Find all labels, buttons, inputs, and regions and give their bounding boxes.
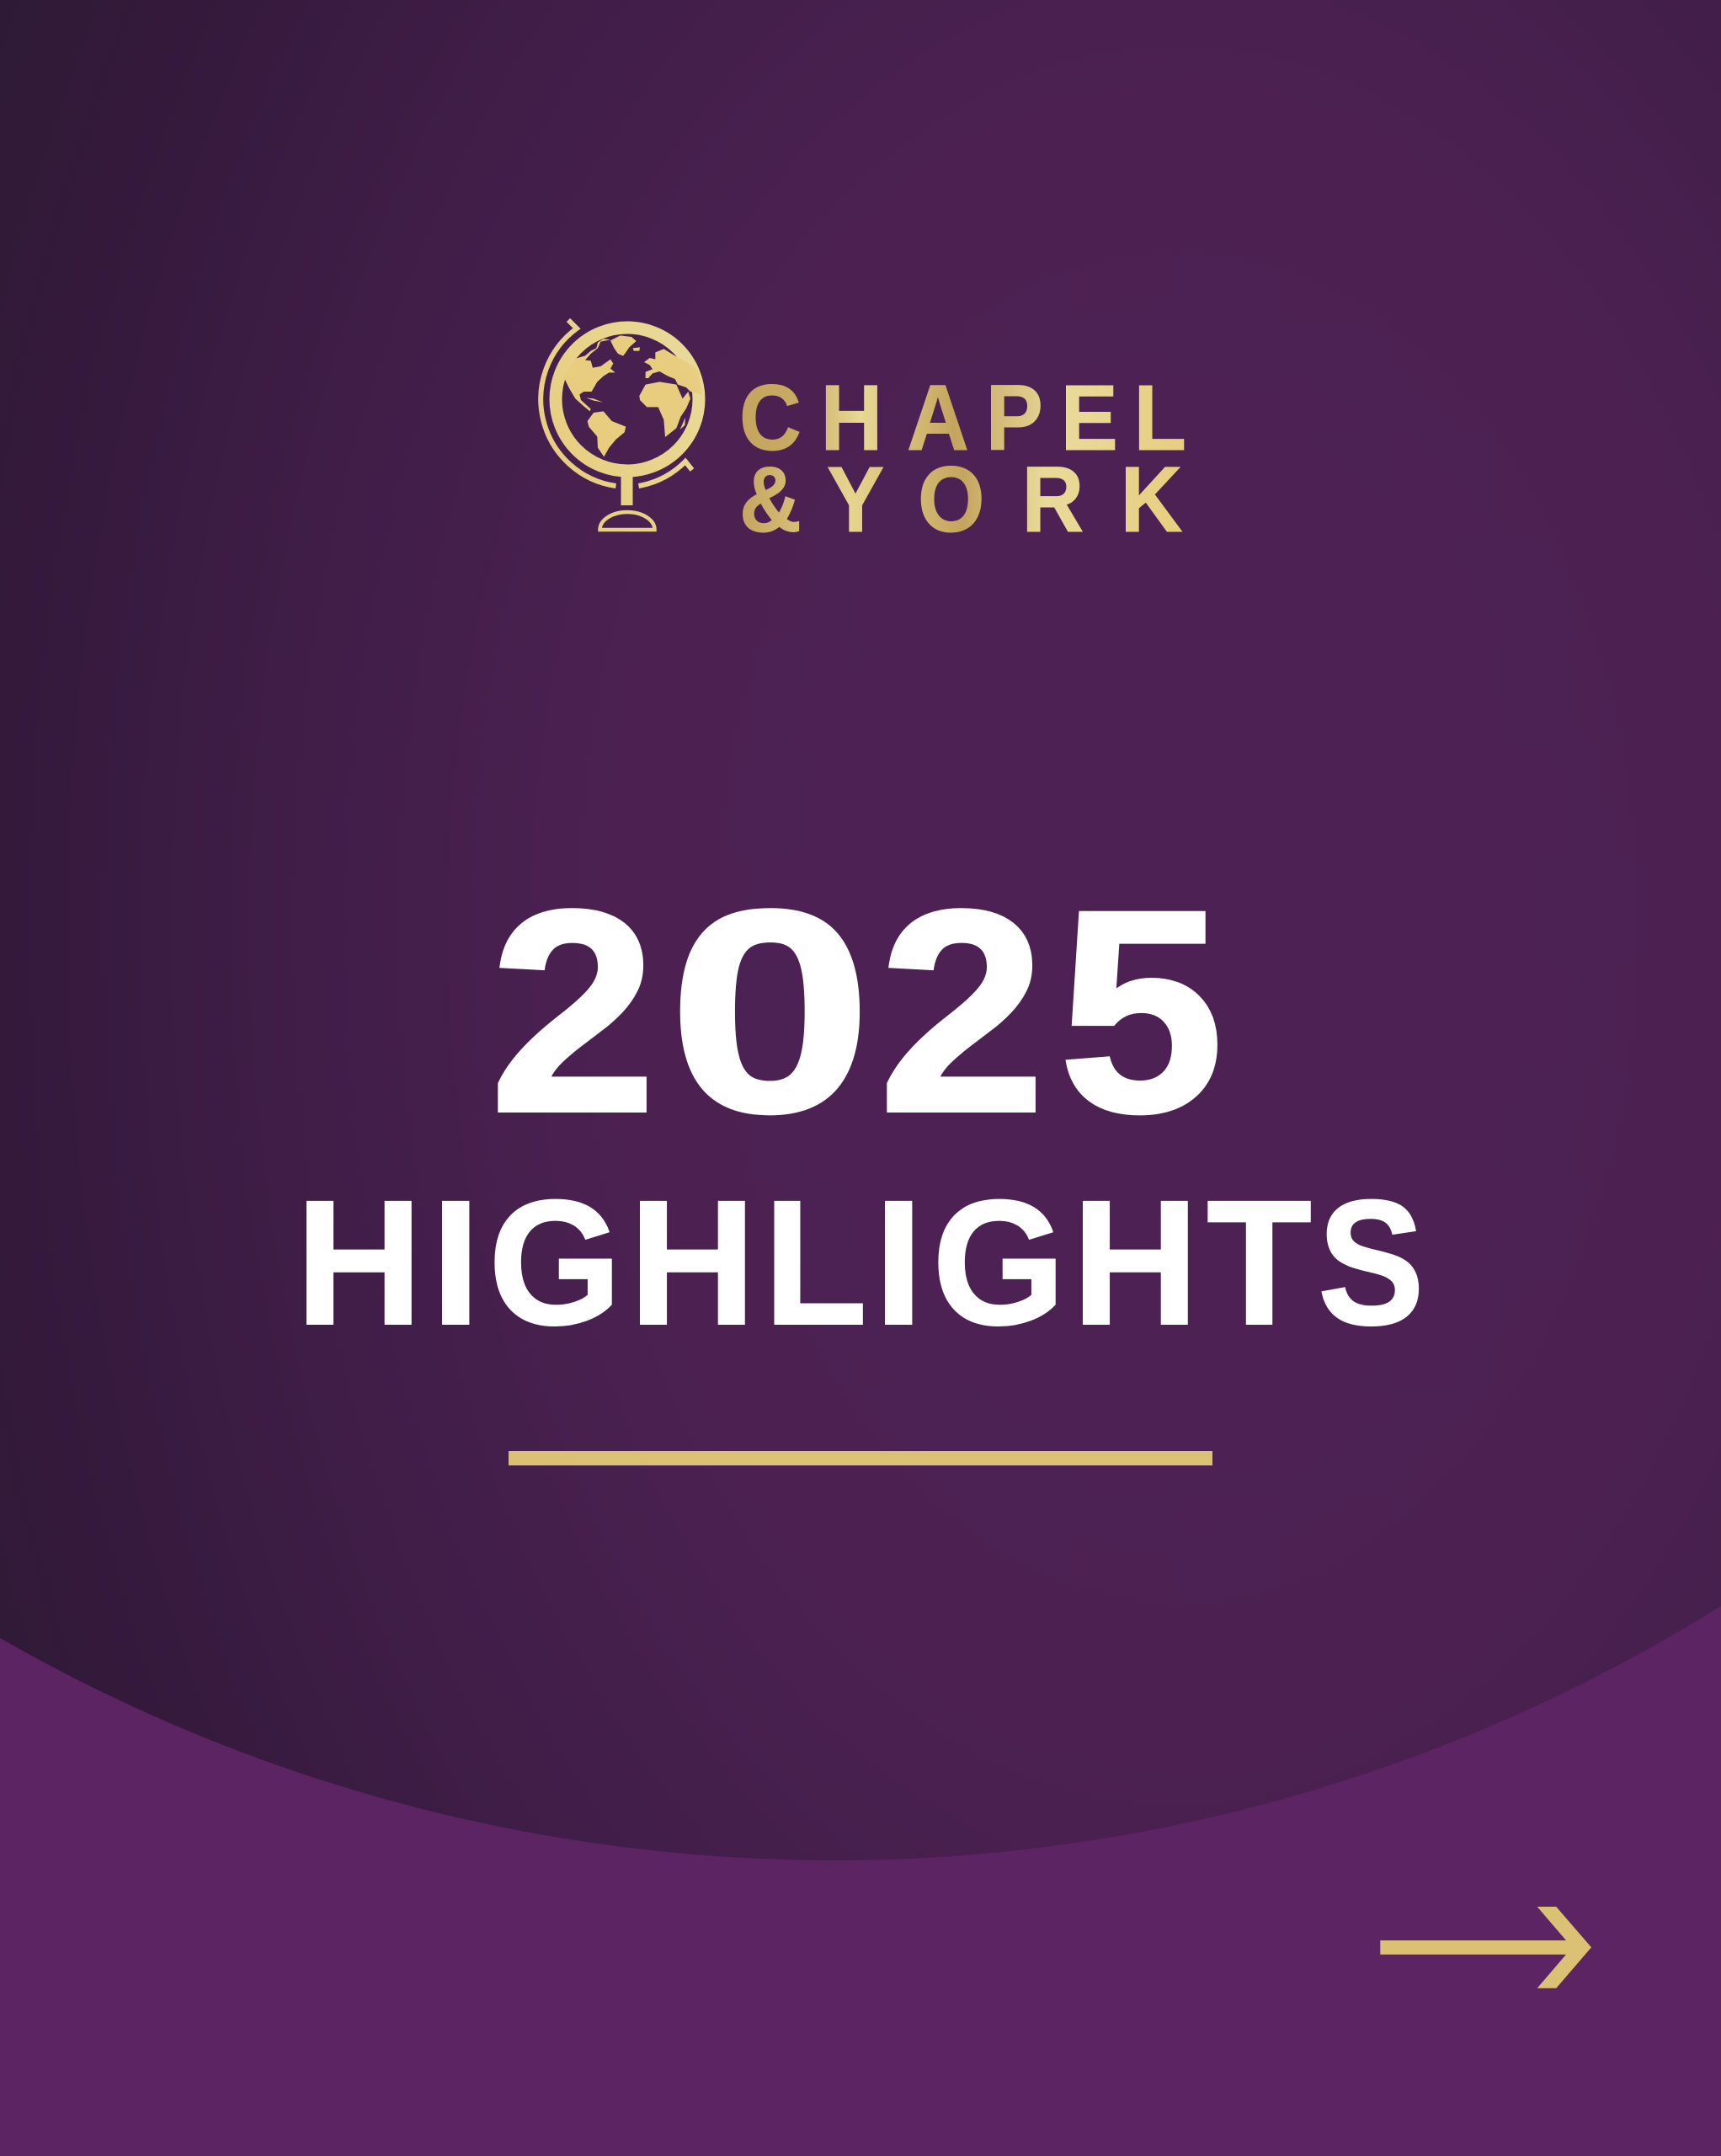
heading: 2025: 5 — [1058, 851, 1224, 1172]
globe stem — [621, 475, 633, 505]
heading: HIGHLIGHTS: I — [874, 1163, 924, 1362]
gold divider bar — [509, 1451, 1212, 1465]
wordmark line: CHAPEL: CHAPEL — [739, 366, 1186, 470]
heading: 2025 — [489, 851, 1224, 1172]
globe ring — [556, 328, 699, 471]
globe continents — [560, 335, 701, 456]
heading: HIGHLIGHTS — [296, 1163, 1425, 1362]
heading: 2025: 2 — [489, 851, 657, 1172]
heading: 2025: 0 — [668, 851, 872, 1172]
heading: HIGHLIGHTS: I — [431, 1163, 481, 1362]
heading: HIGHLIGHTS: H — [1072, 1163, 1199, 1362]
heading: HIGHLIGHTS: G — [488, 1163, 622, 1362]
icon: arrow right — [1380, 1907, 1591, 1988]
globe outer meridian arc right — [638, 462, 692, 486]
heading: HIGHLIGHTS: L — [764, 1163, 867, 1362]
wordmark line: & YORK: &YORK — [739, 448, 1183, 552]
globe base — [599, 512, 655, 530]
icon: globe — [541, 320, 701, 530]
heading: 2025: 2 — [878, 851, 1046, 1172]
heading: HIGHLIGHTS: T — [1207, 1163, 1312, 1362]
logo: Chapel & York — [541, 320, 1186, 552]
heading: HIGHLIGHTS: H — [629, 1163, 756, 1362]
globe outer meridian arc left — [541, 320, 616, 486]
heading: HIGHLIGHTS: G — [932, 1163, 1066, 1362]
heading: HIGHLIGHTS: H — [296, 1163, 423, 1362]
heading: HIGHLIGHTS: S — [1318, 1163, 1425, 1362]
